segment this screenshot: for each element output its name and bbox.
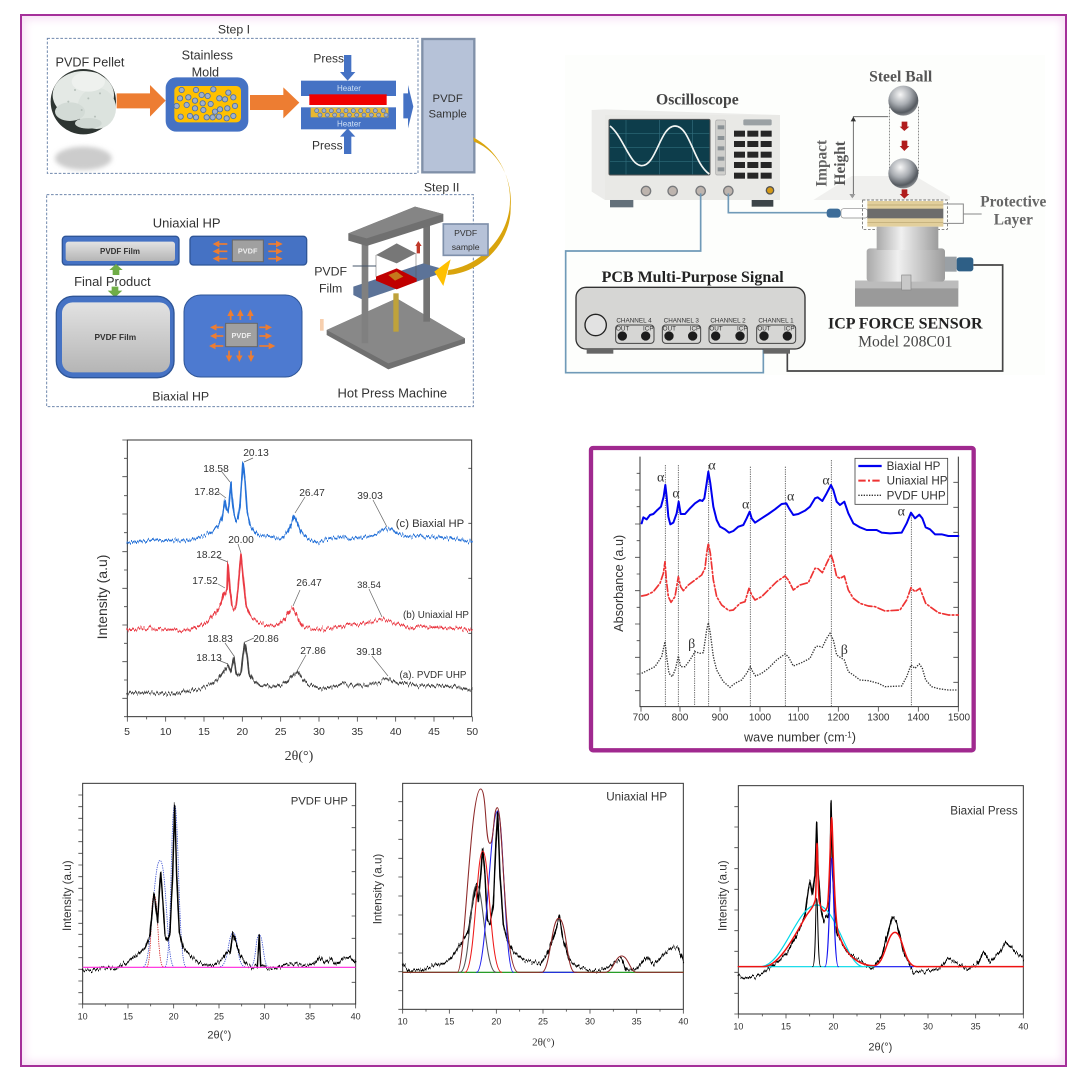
uniaxial film — [62, 236, 179, 265]
x tick labels: 1200 — [827, 713, 850, 724]
label: Stainless Mold: Stainless — [182, 48, 233, 62]
peak labels alpha and beta: α — [742, 497, 750, 512]
hot press machine — [320, 207, 465, 369]
signal conditioner box: ICP — [784, 326, 795, 333]
label: PVDF Film: Film — [319, 282, 342, 296]
label: PVDF Film — [314, 264, 376, 296]
ICP force sensor — [855, 227, 973, 307]
label: Impact Height: Impact — [814, 139, 831, 187]
peak labels alpha and beta: β — [841, 643, 848, 658]
axes, ticks and labels: 20 — [169, 1011, 179, 1021]
biaxial press setup: PVDF — [232, 331, 252, 340]
x tick labels: 800 — [672, 713, 689, 724]
label: Hot Press Machine: Hot Press Machine — [337, 385, 447, 400]
axes, ticks and labels: Uniaxial HP — [606, 791, 667, 804]
signal conditioner box: ICP — [737, 326, 748, 333]
peak labels: 17.52 — [192, 576, 218, 587]
x axis title: -1 — [845, 731, 852, 740]
chart: XRD patterns — [94, 440, 478, 764]
axes, ticks and labels — [371, 783, 688, 1049]
axes, ticks and labels: 30 — [260, 1011, 270, 1021]
label: Final Product: Final Product — [74, 274, 151, 289]
peak labels alpha and beta: α — [787, 490, 795, 505]
label: Stainless Mold — [182, 48, 233, 80]
axes, ticks and labels — [61, 783, 361, 1041]
box: PVDF Sample: PVDF — [433, 93, 463, 105]
axes, ticks and labels: 20 — [491, 1016, 501, 1026]
label: Press top: Press — [313, 52, 344, 66]
purple frame — [591, 448, 974, 750]
impact height indicator — [849, 117, 888, 198]
box: PVDF sample — [443, 224, 488, 255]
signal conditioner box: OUT — [757, 326, 771, 333]
signal conditioner box: ICP — [643, 326, 654, 333]
label: Impact Height: Height — [832, 140, 849, 185]
legend: Biaxial HP — [887, 460, 941, 473]
x tick labels: 30 — [313, 726, 325, 738]
x axis title: wave number (cm — [744, 731, 845, 745]
x tick labels: 15 — [198, 726, 210, 738]
peak labels — [192, 448, 383, 664]
curve: uniaxial HP — [642, 543, 958, 615]
fit curves — [403, 789, 683, 972]
green double arrow — [108, 264, 123, 297]
axes, ticks and labels: 40 — [1018, 1021, 1028, 1031]
reference dotted lines — [665, 460, 911, 707]
axes, ticks and labels: 25 — [214, 1011, 224, 1021]
label: PCB Multi-Purpose Signal: PCB Multi-Purpose Signal — [602, 269, 784, 286]
axes, ticks and labels: Intensity (a.u) — [716, 860, 729, 931]
leader lines — [218, 458, 388, 676]
x tick labels: 45 — [428, 726, 440, 738]
x tick labels: 1300 — [867, 713, 890, 724]
axes, ticks and labels: 10 — [398, 1016, 408, 1026]
biaxial film — [56, 296, 174, 378]
series label: uniaxial: (b) Uniaxial HP — [403, 610, 469, 621]
signal conditioner box: OUT — [616, 326, 629, 333]
Step I dashed box — [47, 38, 418, 173]
curve: PVDF UHP — [642, 623, 957, 690]
x tick labels: 20 — [236, 726, 248, 738]
baseline — [83, 966, 356, 969]
curved gold arrow — [434, 137, 511, 286]
legend — [855, 458, 948, 504]
axes, ticks and labels: 30 — [585, 1016, 595, 1026]
axes, ticks and labels: Biaxial Press — [950, 804, 1018, 817]
wire: ICP to force sensor — [787, 265, 1003, 371]
peak labels: 26.47 — [299, 488, 325, 499]
signal conditioner box: CHANNEL 2 — [710, 317, 746, 324]
series label: biaxial: (c) Biaxial HP — [396, 518, 464, 530]
label: Press bottom: Press — [312, 138, 343, 152]
legend: PVDF UHP — [887, 489, 946, 502]
heater press assembly — [301, 81, 396, 129]
label: PVDF Film: PVDF — [314, 264, 348, 278]
peak labels: 39.18 — [356, 647, 382, 658]
chart: deconvolution PVDF UHP — [61, 783, 361, 1041]
pellet photo — [51, 69, 116, 134]
panel: FTIR chart framed — [591, 448, 974, 750]
drop path with steel balls and arrows — [888, 86, 919, 199]
box: PVDF sample: sample — [452, 242, 480, 252]
x axis title: ) — [852, 731, 856, 745]
x tick labels: 1400 — [907, 713, 930, 724]
peak labels: 18.58 — [203, 464, 229, 475]
axes, ticks and labels: 2θ(°) — [532, 1037, 555, 1049]
x tick labels — [633, 713, 971, 724]
peak labels alpha and beta: α — [708, 458, 716, 473]
axes and ticks — [635, 457, 958, 712]
fit curves — [738, 818, 1023, 967]
box: PVDF sample: PVDF — [454, 228, 477, 238]
legend: Uniaxial HP — [887, 475, 948, 488]
y axis title: Intensity (a.u) — [94, 555, 110, 639]
label: PVDF Pellet: PVDF Pellet — [56, 56, 125, 70]
signal conditioner box: CHANNEL 4 — [616, 317, 652, 324]
axes, ticks and labels: 15 — [444, 1016, 454, 1026]
small blue arrow — [403, 85, 413, 128]
wire: oscilloscope to signal box OUT — [566, 193, 763, 373]
axes, ticks and labels: 30 — [923, 1021, 933, 1031]
x tick labels: 35 — [351, 726, 363, 738]
fit curves — [143, 805, 268, 967]
peak labels: 17.82 — [194, 487, 220, 498]
x tick labels: 10 — [160, 726, 172, 738]
box: PVDF Sample: Sample — [428, 108, 467, 120]
peak labels alpha and beta — [657, 458, 906, 658]
PVDF sensor layer stack — [827, 200, 982, 229]
axes, ticks and labels: 25 — [876, 1021, 886, 1031]
curve: PVDF UHP — [127, 643, 472, 694]
platform — [813, 176, 950, 200]
y axis title: Absorbance (a.u) — [612, 535, 626, 632]
heading: Step I: Step I — [218, 22, 250, 36]
axes, ticks and labels: 35 — [632, 1016, 642, 1026]
peak labels alpha and beta: β — [688, 637, 695, 652]
curve: biaxial HP — [642, 472, 958, 536]
arrow: mold to heater — [250, 87, 299, 118]
series label: PVDF UHP: (a). PVDF UHP — [400, 670, 467, 681]
heater press assembly: Heater — [337, 84, 361, 93]
x tick labels: 900 — [712, 713, 729, 724]
biaxial film: PVDF Film — [95, 332, 136, 342]
peak labels: 27.86 — [300, 646, 326, 657]
measured curve — [83, 804, 356, 971]
backdrop — [565, 55, 1045, 375]
peak labels: 26.47 — [296, 578, 322, 589]
axes, ticks and labels: 15 — [123, 1011, 133, 1021]
label: Protective Layer — [980, 194, 1047, 229]
label: Biaxial HP: Biaxial HP — [152, 390, 209, 404]
peak labels: 20.86 — [253, 634, 279, 645]
x tick labels: 1500 — [948, 713, 971, 724]
axes, ticks and labels: 25 — [538, 1016, 548, 1026]
curve: uniaxial HP — [127, 554, 472, 630]
axes, ticks and labels: 40 — [351, 1011, 361, 1021]
blurred shadow — [55, 147, 112, 170]
x tick labels: 1100 — [788, 713, 810, 724]
chart: deconvolution Uniaxial HP — [371, 783, 688, 1049]
x tick labels — [124, 726, 478, 738]
label: Protective Layer: Protective — [980, 194, 1047, 211]
signal conditioner box: CHANNEL 3 — [664, 317, 699, 324]
axes, ticks and labels: 10 — [78, 1011, 88, 1021]
box: PVDF Sample — [422, 39, 474, 172]
Step II dashed box — [47, 195, 473, 407]
oscilloscope — [592, 109, 780, 207]
peak labels alpha and beta: α — [672, 486, 680, 501]
label: Stainless Mold: Mold — [192, 66, 219, 80]
uniaxial film: PVDF Film — [100, 247, 140, 256]
label: Steel Ball: Steel Ball — [869, 69, 933, 86]
axes, ticks and labels: 2θ(°) — [207, 1029, 231, 1041]
panel: fabrication process schematic — [47, 22, 511, 407]
signal conditioner box — [576, 287, 805, 354]
axes, ticks and labels: 15 — [781, 1021, 791, 1031]
press arrow bottom — [340, 128, 355, 154]
axes, ticks and labels: Intensity (a.u) — [61, 860, 74, 931]
peak labels: 18.13 — [196, 653, 222, 664]
label: Uniaxial HP: Uniaxial HP — [153, 216, 221, 231]
chart: deconvolution Biaxial Press — [716, 786, 1028, 1054]
uniaxial press setup — [190, 236, 307, 265]
curve: biaxial HP — [127, 463, 472, 543]
panel: impact test setup — [565, 55, 1047, 375]
peak labels: 18.83 — [207, 634, 233, 645]
axes, ticks and labels: Intensity (a.u) — [371, 854, 384, 924]
peak labels alpha and beta: α — [822, 474, 830, 489]
axes, ticks and labels: 2θ(°) — [868, 1042, 892, 1054]
heading: Step II: Step II — [424, 181, 459, 195]
measured curve — [738, 801, 1023, 978]
label: Protective Layer: Layer — [994, 212, 1033, 229]
wire: oscilloscope to PVDF sensor — [728, 193, 828, 213]
peak labels: 18.22 — [196, 550, 222, 561]
label: Impact Height — [814, 139, 849, 187]
axes, ticks and labels — [716, 786, 1028, 1054]
stainless mold with pellets — [166, 77, 248, 132]
signal conditioner box: CHANNEL 1 — [758, 317, 794, 324]
peak labels alpha and beta: α — [657, 470, 665, 485]
signal conditioner box: ICP — [690, 326, 700, 333]
axes, ticks and labels: 40 — [678, 1016, 688, 1026]
peak labels: 20.00 — [228, 535, 254, 546]
x tick labels: 1000 — [749, 713, 772, 724]
axes, ticks and labels: 35 — [305, 1011, 315, 1021]
x axis title: 2θ(°) — [285, 749, 314, 764]
uniaxial press setup: PVDF — [238, 246, 258, 255]
x tick labels: 700 — [633, 713, 650, 724]
x tick labels: 25 — [275, 726, 287, 738]
label: ICP FORCE SENSOR: ICP FORCE SENSOR — [828, 316, 983, 333]
x tick labels: 5 — [124, 726, 130, 738]
axes, ticks and labels: 10 — [733, 1021, 743, 1031]
biaxial press setup — [184, 295, 302, 377]
heater press assembly: Heater — [337, 119, 361, 128]
x tick labels: 40 — [390, 726, 402, 738]
axes, ticks and labels: PVDF UHP — [291, 795, 348, 807]
peak labels: 38.54 — [357, 580, 381, 591]
arrow: pellet to mold — [117, 85, 166, 117]
peak labels: 20.13 — [243, 448, 269, 459]
axes and ticks — [122, 440, 472, 722]
peak labels alpha and beta: α — [898, 505, 906, 520]
signal conditioner box: OUT — [663, 326, 676, 333]
x tick labels: 50 — [466, 726, 478, 738]
press arrow top — [340, 55, 355, 81]
measured curve — [403, 812, 683, 972]
signal conditioner box: OUT — [709, 326, 723, 333]
label: Oscilloscope: Oscilloscope — [656, 91, 739, 108]
axes, ticks and labels: 35 — [971, 1021, 981, 1031]
label: model number: Model 208C01 — [858, 333, 953, 350]
axes, ticks and labels: 20 — [828, 1021, 838, 1031]
peak labels: 39.03 — [357, 491, 383, 502]
